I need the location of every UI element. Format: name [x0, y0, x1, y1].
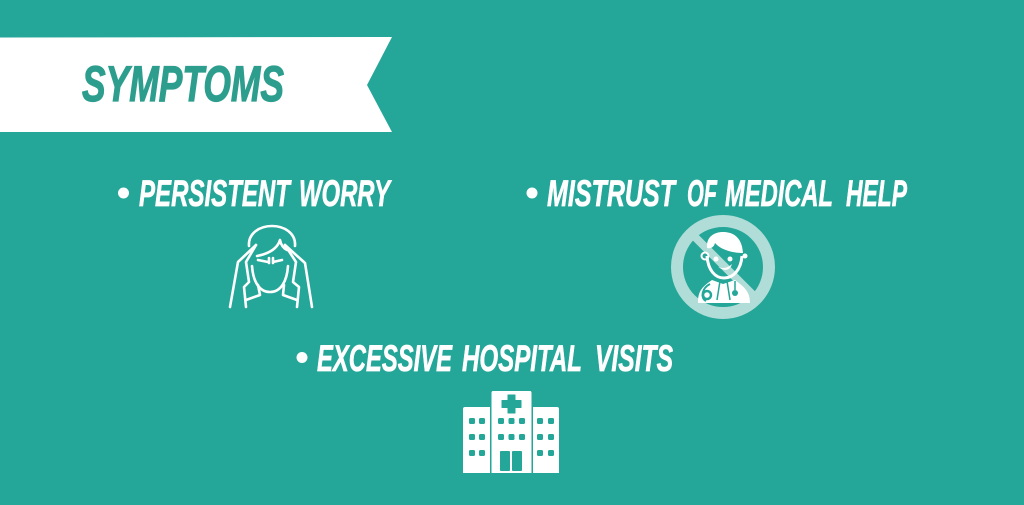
label: OF	[687, 173, 718, 214]
title: SYMPTOMS	[82, 56, 284, 112]
label: PERSISTENT	[139, 173, 292, 214]
banner: symptoms heading	[0, 37, 392, 132]
label: MEDICAL	[725, 173, 833, 214]
label: HOSPITAL	[462, 338, 582, 379]
label	[296, 338, 673, 379]
label: EXCESSIVE	[317, 338, 453, 379]
label	[526, 173, 907, 214]
icon: hospital	[463, 391, 559, 473]
icon: doctor in prohibition sign	[677, 221, 769, 313]
label: VISITS	[595, 338, 673, 379]
label: MISTRUST	[547, 173, 677, 214]
label: WORRY	[299, 173, 392, 214]
symptom: excessive hospital visits	[296, 338, 673, 473]
icon: woman with headache	[230, 226, 312, 307]
symptom: mistrust of medical help	[526, 173, 907, 313]
symptom: persistent worry	[118, 173, 392, 307]
label: HELP	[846, 173, 907, 214]
